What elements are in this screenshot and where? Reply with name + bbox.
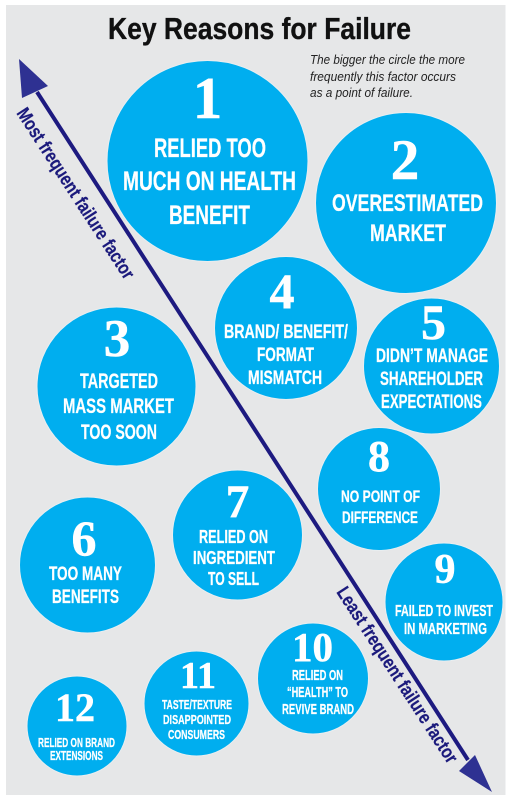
circle 10: 10: [292, 624, 333, 670]
circle 4: MISMATCH: [248, 368, 322, 389]
circle 2: MARKET: [370, 220, 446, 247]
circle 12: EXTENSIONS: [50, 748, 103, 763]
circle 6: BENEFITS: [52, 586, 119, 608]
title: Key Reasons for Failure: [108, 11, 411, 46]
circle 4: 4: [270, 263, 294, 319]
circle 3: TOO SOON: [81, 421, 157, 444]
circle 2: [316, 112, 496, 294]
circle 11: DISAPPOINTED: [163, 712, 231, 727]
label: most frequent: Most frequent failure factor: [12, 104, 139, 284]
circle 7: 7: [226, 476, 249, 528]
circle 1: 1: [193, 65, 222, 131]
circle 4: FORMAT: [257, 345, 314, 366]
circle 6: [20, 497, 156, 633]
note: circle size explanation: The bigger the circle the more: [310, 53, 465, 67]
circle 4: BRAND/ BENEFIT/: [224, 322, 349, 343]
circle 3: 3: [104, 310, 130, 368]
circle 4: [214, 256, 358, 400]
circle 1: MUCH ON HEALTH: [123, 166, 296, 196]
circle 3: MASS MARKET: [63, 395, 174, 418]
circle 1: BENEFIT: [169, 200, 250, 230]
circle 11: 11: [180, 655, 216, 697]
circle 8: 8: [368, 432, 390, 481]
circle 1: [107, 60, 308, 262]
circle 10: [258, 623, 368, 734]
circle 10: REVIVE BRAND: [282, 702, 354, 718]
note: circle size explanation: frequently this factor occurs: [310, 70, 456, 84]
circle 11: CONSUMERS: [168, 727, 225, 742]
circle 7: TO SELL: [208, 569, 259, 589]
circle 3: [37, 307, 196, 466]
circle 7: INGREDIENT: [193, 548, 275, 568]
circle 9: 9: [434, 547, 456, 593]
circle 10: RELIED ON: [292, 668, 343, 684]
circle 6: 6: [72, 510, 96, 566]
note: circle size explanation: [310, 53, 465, 100]
circle 3: TARGETED: [80, 370, 158, 393]
circle 11: TASTE/TEXTURE: [162, 697, 232, 712]
circle 11: [144, 651, 249, 756]
circle 10: “HEALTH” TO: [287, 685, 348, 701]
circle 8: NO POINT OF: [341, 487, 420, 506]
circle 1: RELIED TOO: [154, 133, 266, 163]
note: circle size explanation: as a point of failure.: [310, 86, 413, 100]
circle 9: [385, 543, 503, 661]
circle 2: 2: [391, 129, 419, 192]
circle 7: [172, 470, 302, 600]
circle 5: 5: [421, 294, 446, 350]
circle 7: RELIED ON: [199, 527, 268, 547]
circle 12: [27, 676, 127, 776]
circle 12: RELIED ON BRAND: [38, 735, 115, 750]
circle 8: [318, 428, 440, 550]
circle 12: 12: [55, 685, 95, 730]
circle 6: TOO MANY: [49, 563, 122, 585]
circle 8: DIFFERENCE: [342, 508, 418, 527]
circle 5: [364, 294, 500, 434]
